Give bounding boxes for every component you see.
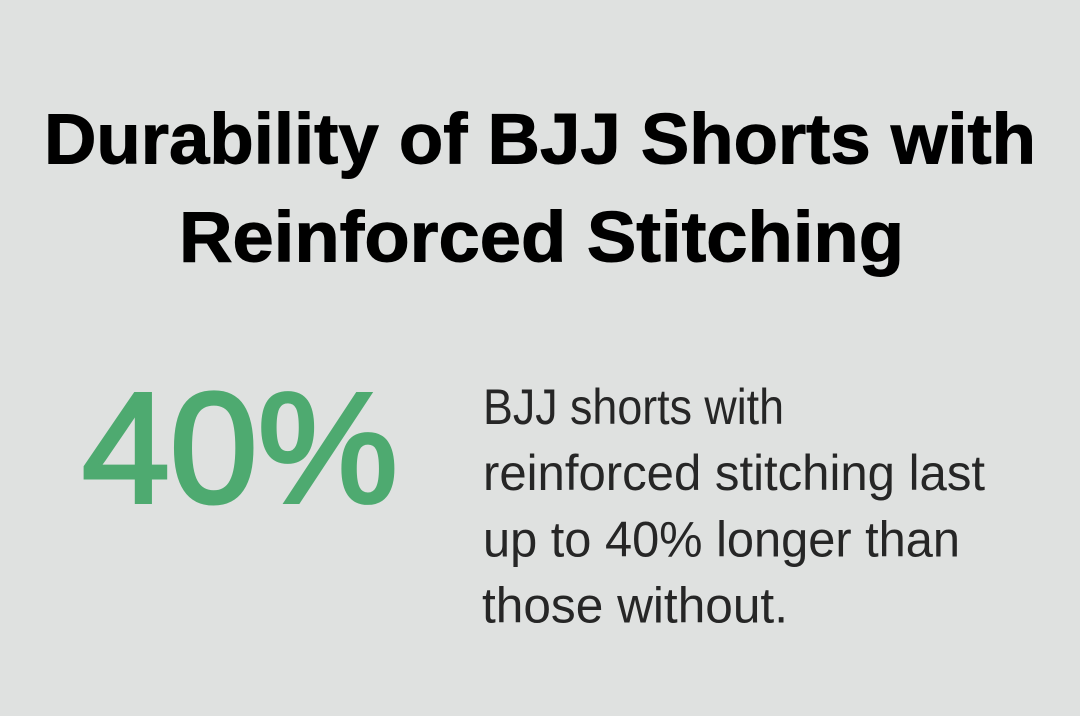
description text: BJJ shorts with <box>483 379 784 435</box>
title <box>44 100 1036 278</box>
description text: up to 40% longer than <box>483 512 960 568</box>
title: Reinforced Stitching <box>179 198 904 278</box>
description text: those without. <box>482 578 788 634</box>
title: Durability of BJJ Shorts with <box>44 100 1036 180</box>
big statistic: 40%: 40% <box>82 361 398 536</box>
description text <box>482 379 985 634</box>
description text: reinforced stitching last <box>483 445 985 501</box>
